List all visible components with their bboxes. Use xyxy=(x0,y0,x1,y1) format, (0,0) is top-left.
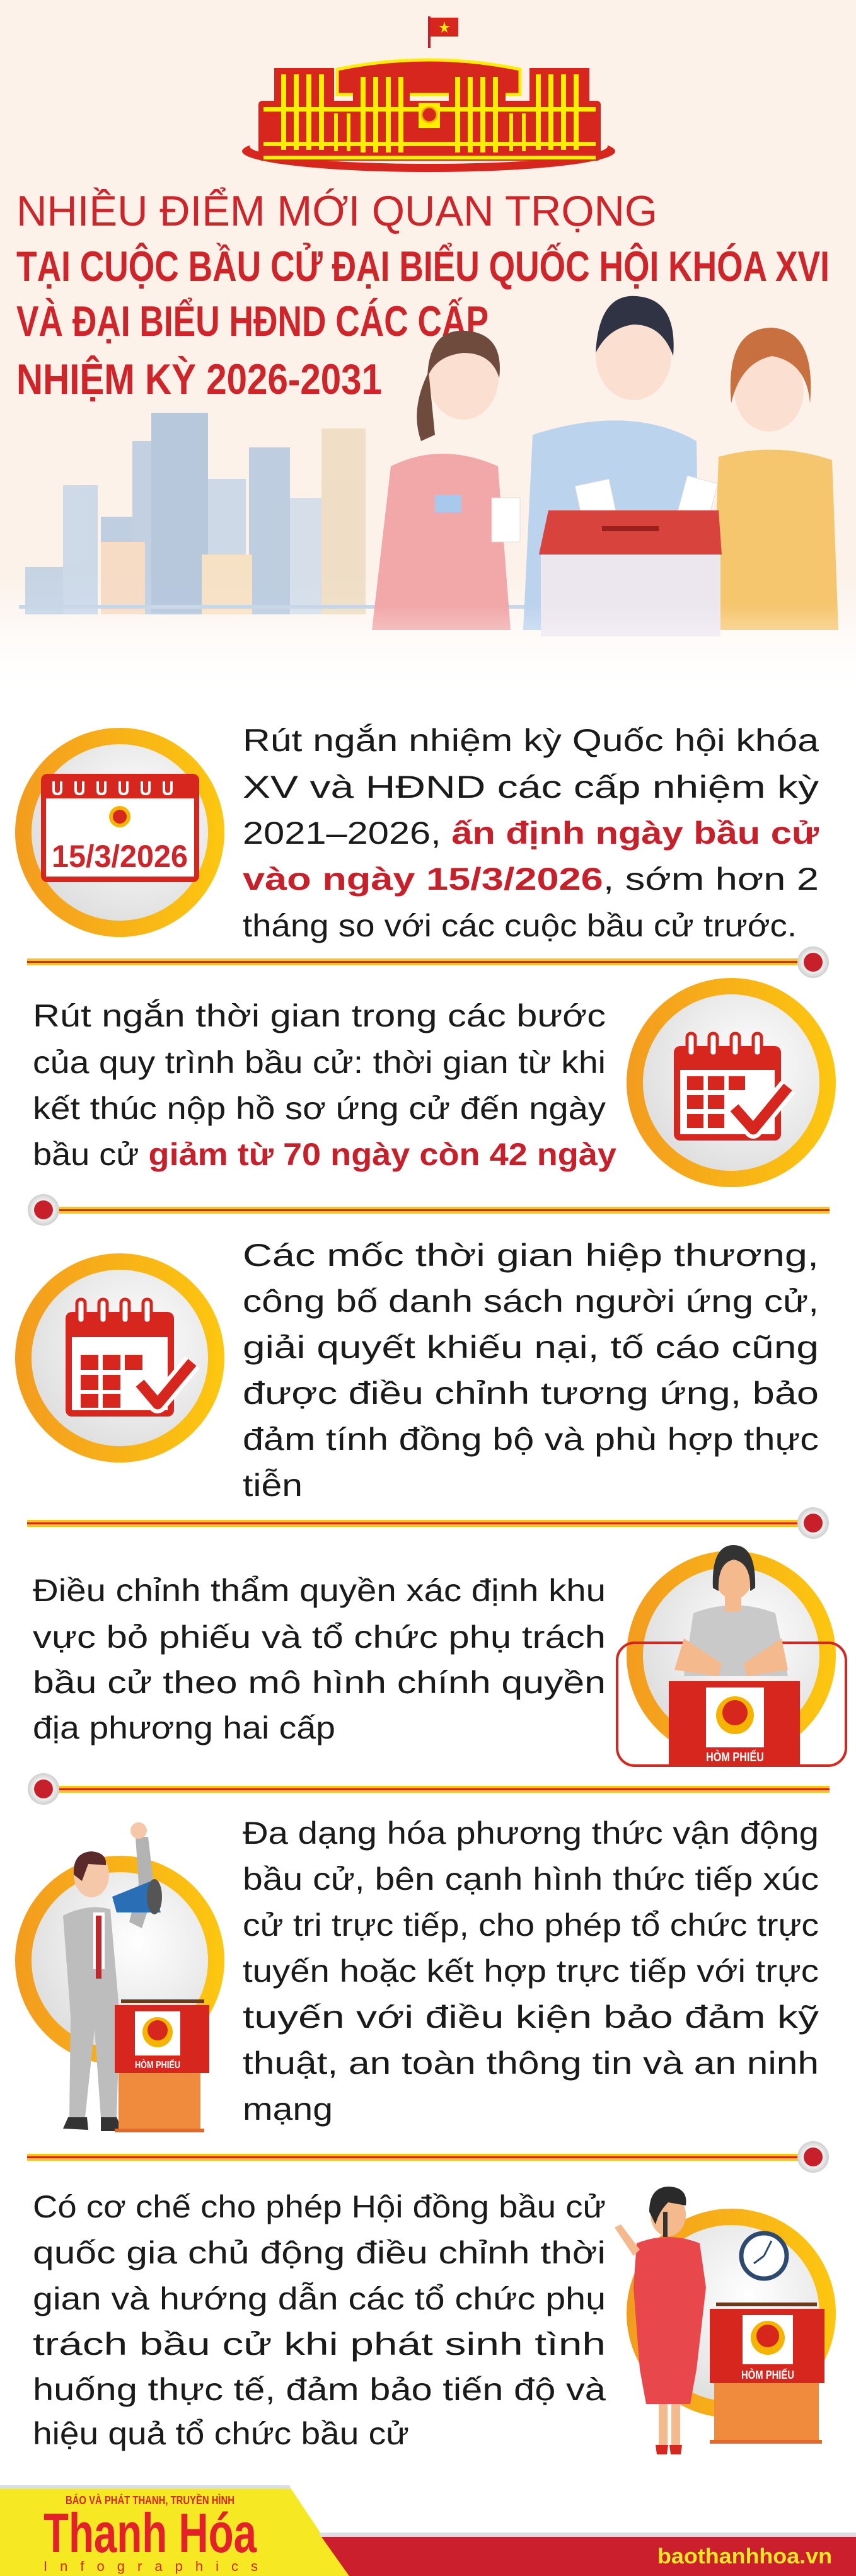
icon: calendar 15/3/2026 xyxy=(15,728,224,937)
text: timelines adjusted: đảm tính đồng bộ và phù hợp thực xyxy=(243,1422,819,1457)
text: shortened steps: của quy trình bầu cử: thời gian từ khi xyxy=(33,1045,606,1080)
text: campaign methods: cử tri trực tiếp, cho phép tổ chức trực xyxy=(243,1907,819,1943)
section 6 xyxy=(33,2187,836,2454)
section 3 xyxy=(15,1238,819,1503)
woman right xyxy=(712,450,838,630)
title: NHIỆM KỲ 2026-2031 xyxy=(16,355,382,403)
woman left xyxy=(372,454,511,630)
text: campaign methods: bầu cử, bên cạnh hình thức tiếp xúc xyxy=(243,1861,819,1897)
text: authority adjustment: vực bỏ phiếu và tổ chức phụ trách xyxy=(33,1619,606,1655)
text: campaign methods: Đa dạng hóa phương thức vận động xyxy=(243,1815,819,1851)
text: timelines adjusted: được điều chỉnh tương ứng, bảo xyxy=(243,1376,819,1411)
footer logo: Thanh Hóa xyxy=(43,2502,257,2564)
icon: man with megaphone: HÒM PHIẾU xyxy=(135,2059,180,2071)
icon: woman at ballot box xyxy=(617,1545,846,1766)
illustration: voters at ballot box xyxy=(372,296,838,636)
text: national election council: huống thực tế, đảm bảo tiến độ và xyxy=(33,2372,606,2407)
header background xyxy=(0,0,856,699)
icon: calendar check xyxy=(15,1253,224,1463)
text: shortened term: XV và HĐND các cấp nhiệm kỳ xyxy=(243,769,819,805)
text: shortened steps: Rút ngắn thời gian trong các bước xyxy=(33,998,606,1033)
text: authority adjustment xyxy=(33,1573,606,1745)
text: shortened term: tháng so với các cuộc bầu cử trước. xyxy=(243,908,797,943)
text: authority adjustment: bầu cử theo mô hình chính quyền xyxy=(33,1665,606,1700)
divider 3 xyxy=(27,1507,829,1539)
section 4 xyxy=(33,1545,846,1766)
footer logo: BÁO VÀ PHÁT THANH, TRUYỀN HÌNH xyxy=(66,2493,234,2507)
text: timelines adjusted xyxy=(243,1238,819,1503)
text: shortened steps: bầu cử giảm từ 70 ngày còn 42 ngày xyxy=(33,1137,616,1172)
title: VÀ ĐẠI BIỂU HĐND CÁC CẤP xyxy=(16,297,489,345)
divider 1 xyxy=(27,946,829,978)
text: national election council: quốc gia chủ động điều chỉnh thời xyxy=(33,2235,606,2270)
title xyxy=(16,187,830,403)
icon: calendar check xyxy=(627,978,836,1187)
icon: woman with microphone, clock, ballot box xyxy=(615,2187,836,2454)
text: national election council: trách bầu cử khi phát sinh tình xyxy=(33,2326,606,2362)
text: national election council xyxy=(33,2189,606,2451)
text: authority adjustment: Điều chỉnh thẩm quyền xác định khu xyxy=(33,1573,606,1608)
text: campaign methods: tuyến với điều kiện bảo đảm kỹ xyxy=(243,1999,819,2035)
icon: woman at ballot box: HÒM PHIẾU xyxy=(706,1749,764,1764)
text: authority adjustment: địa phương hai cấp xyxy=(33,1710,335,1745)
text: campaign methods xyxy=(243,1815,819,2127)
icon: woman with microphone, clock, ballot box: HÒM PHIẾU xyxy=(741,2368,794,2381)
text: shortened steps xyxy=(33,998,616,1172)
icon: flag xyxy=(428,16,458,48)
text: national election council: Có cơ chế cho phép Hội đồng bầu cử xyxy=(33,2189,606,2224)
icon: man with megaphone xyxy=(15,1822,224,2132)
footer logo: Infographics xyxy=(43,2558,258,2574)
title: NHIỀU ĐIỂM MỚI QUAN TRỌNG xyxy=(16,187,657,235)
illustration: city skyline xyxy=(19,413,586,614)
divider 2 xyxy=(28,1194,830,1226)
section 1 xyxy=(15,723,819,943)
ballot box xyxy=(539,510,722,555)
text: timelines adjusted: Các mốc thời gian hiệp thương, xyxy=(243,1238,819,1273)
icon: calendar 15/3/2026: 15/3/2026 xyxy=(52,839,188,874)
section 2 xyxy=(33,978,836,1187)
footer xyxy=(0,2485,856,2576)
section 5 xyxy=(15,1815,819,2132)
man xyxy=(523,420,700,630)
text: shortened term: vào ngày 15/3/2026 , sớm hơn 2 xyxy=(243,861,819,897)
text: timelines adjusted: tiễn xyxy=(243,1468,303,1503)
text: national election council: hiệu quả tổ chức bầu cử xyxy=(33,2416,409,2451)
text: shortened steps: kết thúc nộp hồ sơ ứng cử đến ngày xyxy=(33,1091,606,1126)
text: shortened term: Rút ngắn nhiệm kỳ Quốc hội khóa xyxy=(243,723,819,758)
text: timelines adjusted: giải quyết khiếu nại, tố cáo cũng xyxy=(243,1330,819,1365)
footer logo xyxy=(43,2493,258,2574)
divider 5 xyxy=(27,2141,829,2173)
text: campaign methods: mạng xyxy=(243,2091,333,2127)
icon: national assembly building xyxy=(242,60,615,172)
divider 4 xyxy=(28,1773,830,1805)
text: timelines adjusted: công bố danh sách người ứng cử, xyxy=(243,1284,819,1319)
text: campaign methods: tuyến hoặc kết hợp trực tiếp với trực xyxy=(243,1953,819,1989)
footer website: baothanhhoa.vn xyxy=(657,2544,832,2568)
text: shortened term xyxy=(243,723,819,943)
text: shortened term: 2021–2026, ấn định ngày bầu cử xyxy=(243,815,819,851)
text: campaign methods: thuật, an toàn thông tin và an ninh xyxy=(243,2045,819,2081)
text: national election council: gian và hướng dẫn các tổ chức phụ xyxy=(33,2281,606,2316)
